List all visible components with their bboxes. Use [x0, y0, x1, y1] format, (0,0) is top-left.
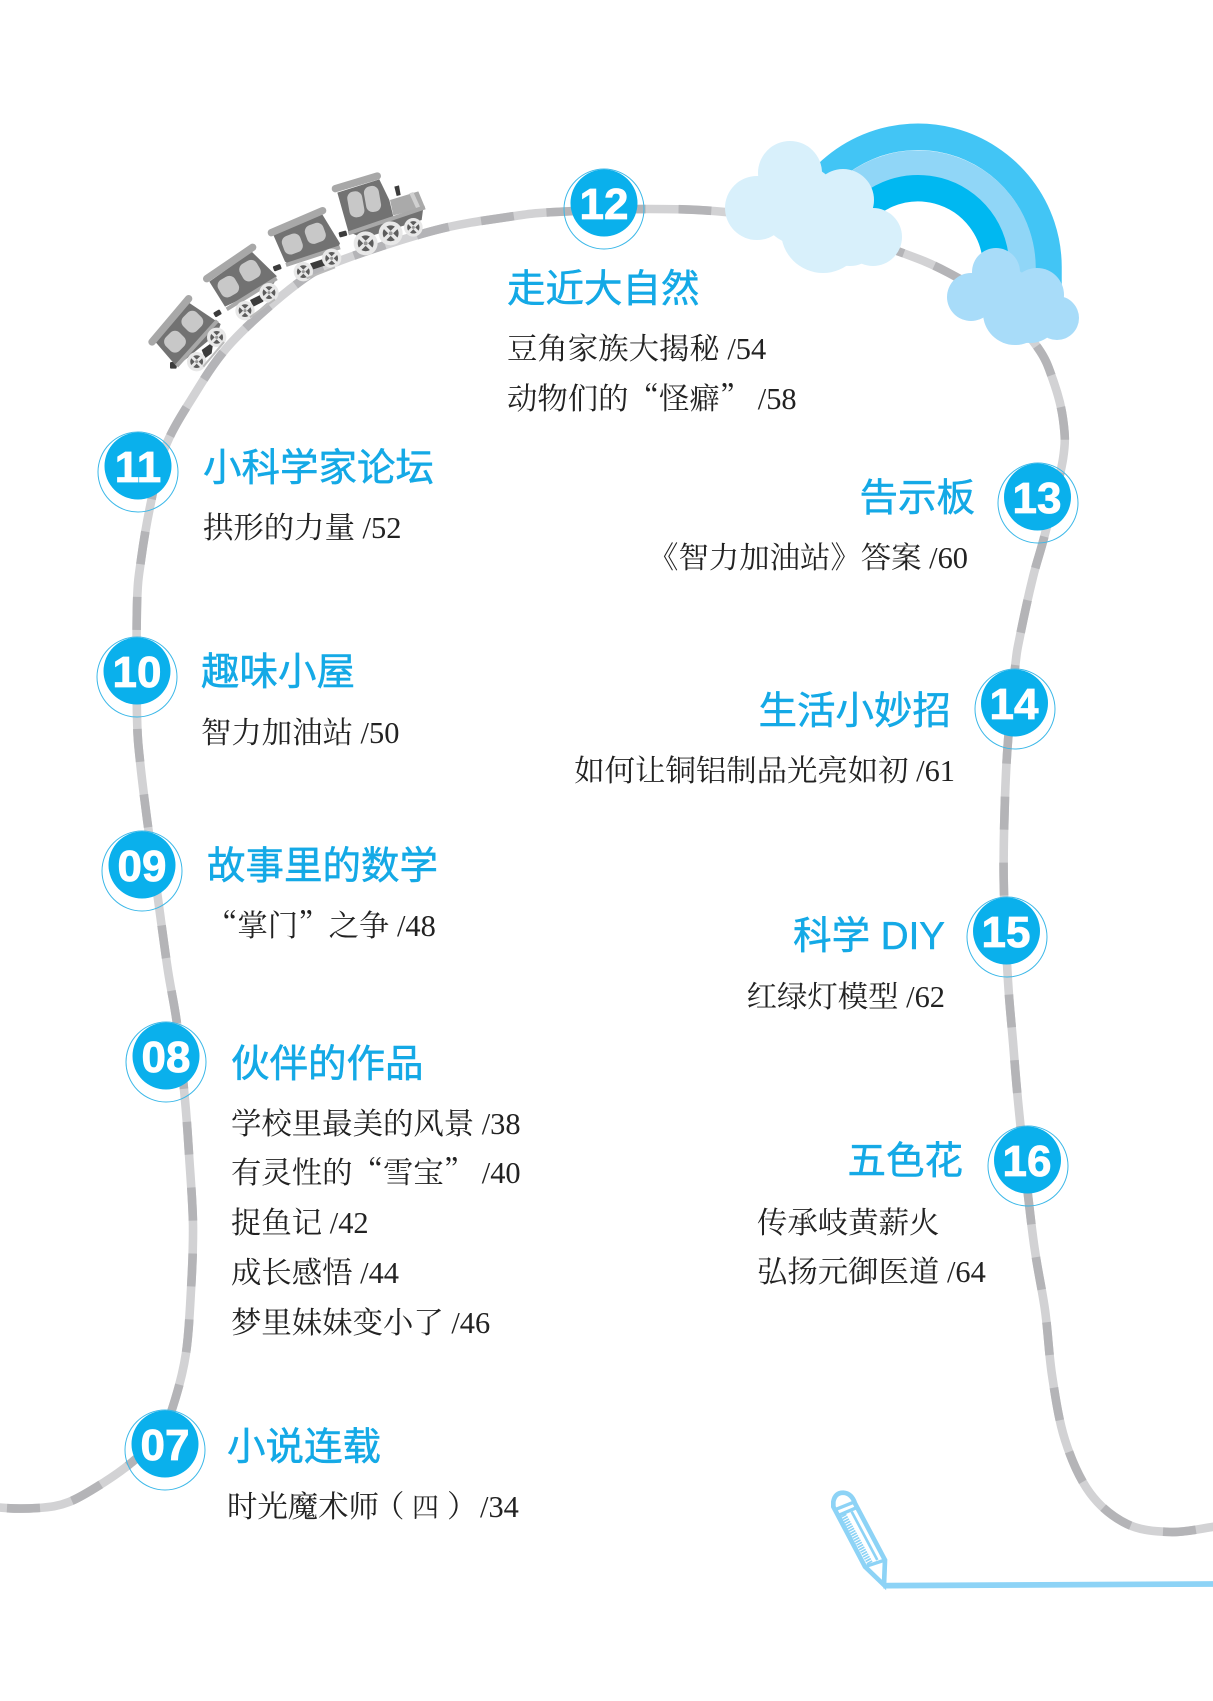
section: 科学 DIY: 科学 DIY [793, 915, 945, 958]
section: 小说连载: ） [447, 1490, 477, 1524]
section: 伙伴的作品: 学校里最美的风景 /38 [231, 1107, 521, 1141]
badge 13 [998, 463, 1078, 543]
icon: train [152, 176, 425, 371]
badge 12 [564, 169, 644, 249]
section: 五色花 [757, 1140, 986, 1289]
car 2 [207, 247, 279, 320]
badge 16 [988, 1126, 1068, 1206]
badge 09 [102, 831, 182, 911]
section: 走近大自然: 豆角家族大揭秘 /54 [507, 332, 766, 366]
section: 科学 DIY [747, 915, 945, 1014]
car 1 [152, 299, 226, 371]
section: 小科学家论坛 [203, 447, 434, 545]
badge 15 [967, 897, 1047, 977]
section: 小科学家论坛: 小科学家论坛 [203, 447, 434, 490]
icon: rainbow [805, 137, 1048, 290]
badge 07 [125, 1410, 205, 1490]
badge 10: 10 [113, 648, 161, 697]
section: 伙伴的作品: 梦里妹妹变小了 /46 [231, 1306, 490, 1340]
section: 五色花: 弘扬元御医道 /64 [757, 1255, 986, 1289]
badge 14: 14 [990, 680, 1039, 729]
section: 伙伴的作品 [231, 1043, 521, 1340]
badge 10 [97, 637, 177, 717]
badge 09: 09 [118, 842, 166, 891]
badge 11 [98, 432, 178, 512]
icon: small cloud [947, 248, 1079, 345]
section: 生活小妙招: 生活小妙招 [758, 690, 951, 733]
section: 伙伴的作品: 有灵性的“雪宝” /40 [231, 1148, 521, 1192]
railway track [0, 209, 1213, 1532]
section: 故事里的数学: “掌门”之争 /48 [207, 901, 436, 945]
section: 五色花: 五色花 [847, 1140, 963, 1183]
section: 小说连载: 小说连载 [227, 1426, 381, 1469]
section: 小说连载 [227, 1426, 519, 1524]
section: 小说连载: 时光魔术师 [227, 1490, 379, 1524]
section: 趣味小屋: 趣味小屋 [201, 651, 355, 694]
badge 08 [126, 1022, 206, 1102]
section: 故事里的数学 [207, 845, 438, 945]
section: 告示板: 告示板 [859, 477, 975, 520]
section: 趣味小屋: 智力加油站 /50 [201, 716, 399, 750]
section: 五色花: 传承岐黄薪火 [757, 1206, 939, 1240]
section: 伙伴的作品: 捉鱼记 /42 [231, 1206, 369, 1240]
engine [335, 176, 425, 255]
section: 走近大自然: 动物们的“怪癖” /58 [507, 374, 797, 418]
section: 走近大自然: 走近大自然 [507, 268, 700, 311]
badge 11: 11 [115, 443, 161, 492]
section: 走近大自然 [507, 268, 797, 418]
section: 伙伴的作品: 伙伴的作品 [231, 1043, 424, 1086]
icon: pencil and crayon line [833, 1493, 1213, 1586]
icon: large cloud [725, 141, 902, 273]
section: 生活小妙招 [574, 690, 955, 788]
badge 13: 13 [1013, 474, 1061, 523]
badge 07: 07 [141, 1421, 189, 1470]
section: 故事里的数学: 故事里的数学 [207, 845, 438, 888]
section: 趣味小屋 [201, 651, 399, 750]
section: 告示板: 《智力加油站》答案 /60 [648, 541, 968, 575]
section: 告示板 [648, 477, 975, 575]
car 3 [271, 211, 341, 281]
badge 08: 08 [142, 1033, 190, 1082]
section: 小说连载: /34 [480, 1490, 519, 1524]
section: 小说连载: 四 [412, 1493, 439, 1523]
section: 小科学家论坛: 拱形的力量 /52 [203, 511, 401, 545]
badge 12: 12 [580, 180, 628, 229]
section: 伙伴的作品: 成长感悟 /44 [231, 1256, 399, 1290]
badge 14 [975, 669, 1055, 749]
badge 15: 15 [982, 908, 1030, 957]
badge 16: 16 [1003, 1137, 1051, 1186]
section: 科学 DIY: 红绿灯模型 /62 [747, 980, 945, 1014]
section: 小说连载: （ [374, 1490, 404, 1524]
section: 生活小妙招: 如何让铜铝制品光亮如初 /61 [574, 754, 955, 788]
